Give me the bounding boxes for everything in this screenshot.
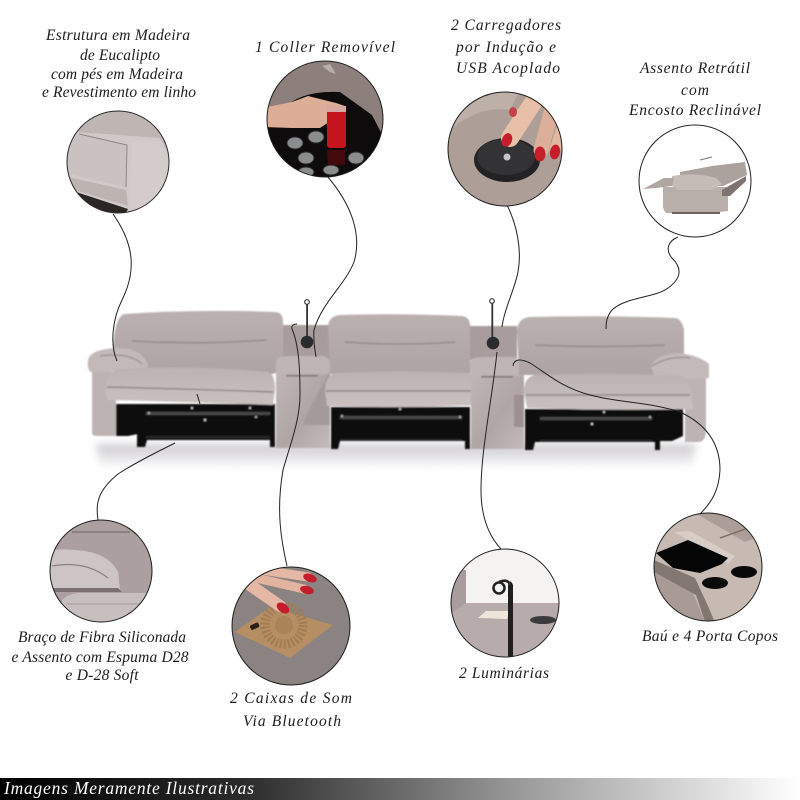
left seat module — [88, 311, 283, 447]
circle outline — [67, 111, 169, 213]
text: assento: Assento Retrátil — [639, 60, 750, 77]
circle outline — [232, 567, 350, 685]
callout: coller removível — [255, 39, 395, 180]
circle outline — [451, 549, 559, 657]
callout: luminárias — [450, 547, 560, 682]
text: assento: com — [681, 82, 709, 99]
connector: coller — [314, 176, 357, 357]
connector: assento retrátil — [606, 237, 679, 329]
photo: cooler with cans — [268, 62, 382, 176]
photo: induction charger — [448, 92, 562, 206]
text: braço — [12, 629, 189, 684]
photo: armrest closeup — [50, 520, 152, 622]
text: braço: e D-28 Soft — [66, 667, 139, 684]
text: estrutura: Estrutura em Madeira — [45, 27, 190, 44]
circle outline — [448, 92, 562, 206]
connector: baú e porta copos — [513, 360, 720, 514]
callout: carregadores — [445, 17, 565, 210]
photo: console with cup holders — [654, 514, 762, 620]
circle outline — [639, 125, 751, 237]
left lamp — [301, 300, 313, 348]
text: assento — [628, 60, 761, 119]
text: luminárias: 2 Luminárias — [459, 665, 549, 682]
text: caixas — [230, 690, 352, 730]
text: baú: Baú e 4 Porta Copos — [642, 628, 778, 645]
text: estrutura: de Eucalipto — [80, 47, 160, 64]
connector: estrutura — [113, 214, 131, 361]
text: estrutura: e Revestimento em linho — [42, 84, 196, 101]
text: caixas: Via Bluetooth — [243, 713, 341, 730]
photo: lamp closeup — [450, 547, 560, 659]
callout: assento retrátil — [628, 60, 761, 242]
left console — [276, 325, 330, 448]
text: caixas: 2 Caixas de Som — [230, 690, 352, 707]
text: estrutura: com pés em Madeira — [51, 66, 183, 83]
text: estrutura — [42, 27, 196, 101]
text: carregadores: por Indução e — [455, 39, 556, 56]
three-seat reclining sofa — [88, 311, 709, 450]
callout: caixas de som — [230, 565, 352, 730]
right console — [470, 326, 524, 449]
connector: caixas de som — [280, 324, 300, 566]
callout: braço de fibra — [12, 518, 189, 684]
text: carregadores: USB Acoplado — [456, 60, 560, 77]
connector: luminárias — [481, 352, 501, 549]
connector: reclining seat detail — [197, 394, 200, 404]
footer bar — [0, 778, 800, 800]
callout: baú e porta copos — [642, 510, 778, 645]
connector: carregadores — [502, 205, 519, 327]
sofa floor shadow — [96, 444, 696, 469]
middle seat module — [325, 314, 478, 449]
text: carregadores: 2 Carregadores — [451, 17, 561, 34]
circle outline — [267, 61, 383, 177]
right lamp — [487, 299, 499, 349]
photo: armrest side — [68, 112, 168, 212]
text: carregadores — [451, 17, 561, 77]
text: braço: Braço de Fibra Siliconada — [18, 629, 186, 646]
text: braço: e Assento com Espuma D28 — [12, 649, 189, 666]
circle outline — [654, 513, 762, 621]
circle outline — [50, 520, 152, 622]
photo: side view reclined — [643, 156, 747, 214]
callout: estrutura em madeira — [42, 27, 196, 220]
right seat module — [517, 316, 709, 450]
connector: braço — [97, 443, 175, 520]
text: assento: Encosto Reclinável — [628, 102, 761, 119]
footer note: Imagens Meramente Ilustrativas — [3, 778, 254, 798]
text: coller: 1 Coller Removível — [255, 39, 395, 56]
photo: bluetooth speaker pad — [230, 565, 352, 687]
